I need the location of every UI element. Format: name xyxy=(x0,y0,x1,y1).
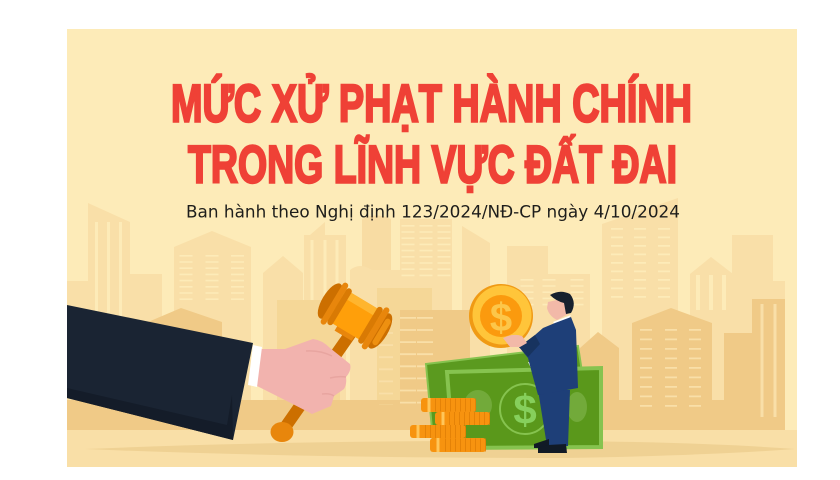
ground shadow xyxy=(85,441,795,458)
sleeve xyxy=(67,305,253,440)
shoes xyxy=(534,439,549,448)
gavel head xyxy=(311,276,399,356)
trousers xyxy=(538,390,570,446)
jacket xyxy=(519,317,578,395)
icon: gavel xyxy=(270,276,399,442)
near skyline buildings xyxy=(67,288,785,430)
head xyxy=(547,298,568,320)
skyline windows xyxy=(96,222,724,420)
icon: banknotes xyxy=(426,346,601,448)
icon: gold coin xyxy=(469,284,533,348)
hand xyxy=(503,335,527,347)
near building windows xyxy=(386,304,775,417)
gavel handle xyxy=(286,330,353,426)
front banknote xyxy=(447,368,601,448)
hand xyxy=(257,339,350,414)
ground xyxy=(67,430,797,467)
title xyxy=(171,74,692,194)
sleeve and hand xyxy=(67,305,350,440)
subtitle: Ban hành theo Nghị định 123/2024/NĐ-CP ngày 4/10/2024 xyxy=(186,202,680,222)
businessman xyxy=(503,292,578,453)
hair xyxy=(550,292,574,314)
icon: gold coin: $ xyxy=(490,296,512,340)
icon: coin stack xyxy=(410,398,490,452)
finger creases xyxy=(306,351,346,396)
cuff xyxy=(248,345,262,387)
panel: banner background xyxy=(67,29,797,467)
back banknote xyxy=(426,346,590,440)
banknote seal xyxy=(500,384,550,434)
far skyline buildings xyxy=(67,198,785,420)
icon: banknotes: $ xyxy=(513,386,537,433)
shirt xyxy=(528,362,537,380)
